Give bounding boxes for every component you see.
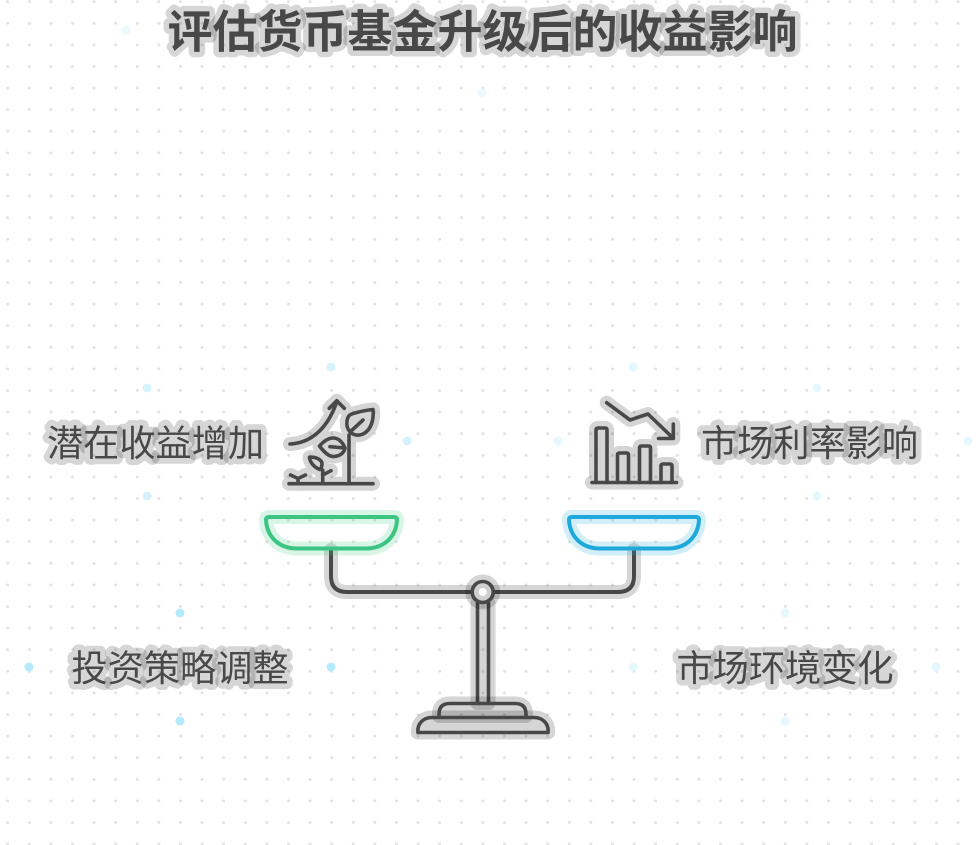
label: market environment change: 市场环境变化 xyxy=(676,648,894,689)
title: 评估货币基金升级后的收益影响 xyxy=(167,6,798,58)
label: market rate impact: 市场利率影响 xyxy=(701,423,918,464)
icon: growing plant with arrow xyxy=(289,401,373,484)
label: investment strategy adjustment: 投资策略调整 xyxy=(72,648,289,689)
stand base xyxy=(418,704,548,732)
scale xyxy=(266,517,699,732)
icon: falling bar chart xyxy=(592,403,676,482)
beam and arms xyxy=(331,550,634,592)
label: potential yield increase: 潜在收益增加 xyxy=(47,423,264,464)
stand column xyxy=(478,603,488,703)
right pan xyxy=(569,517,699,548)
pivot xyxy=(472,582,493,602)
left pan xyxy=(266,517,397,548)
